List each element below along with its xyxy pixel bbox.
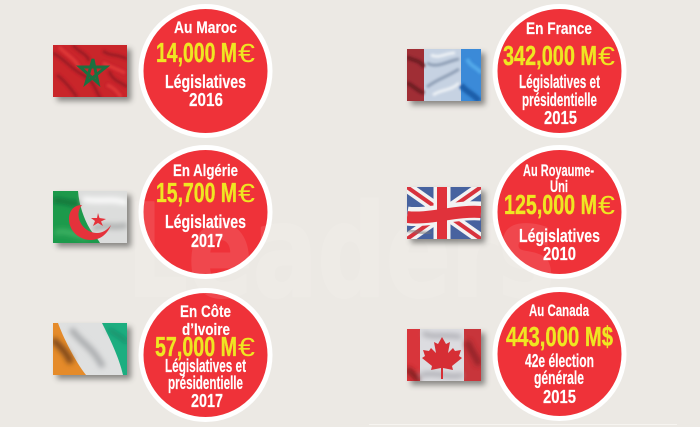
text: Algérie: En Algérie <box>173 161 238 180</box>
circle: Côte d'Ivoire <box>141 290 270 420</box>
text: Canada: générale <box>534 367 584 388</box>
text: Royaume-Uni: 125,000 M <box>504 189 597 220</box>
text: Maroc: 14,000 M <box>156 37 237 68</box>
text: France: présidentielle <box>522 89 597 110</box>
flag: Royaume-Uni <box>407 187 481 239</box>
text: Maroc <box>156 18 256 110</box>
text: Maroc: Au Maroc <box>174 18 237 37</box>
circle: Royaume-Uni <box>495 148 624 276</box>
flag: Algérie <box>53 191 127 243</box>
circle: Canada <box>495 290 624 418</box>
text: Algérie: 2017 <box>191 230 223 251</box>
flag: Canada <box>407 329 481 381</box>
text: Côte d'Ivoire: En Côte <box>180 302 231 321</box>
text: Côte d'Ivoire: Législatives et <box>165 355 246 376</box>
text: Royaume-Uni <box>504 161 616 264</box>
text: France: € <box>598 41 616 71</box>
text: Maroc: 2016 <box>189 89 223 110</box>
text: Algérie: € <box>238 178 256 208</box>
text: Maroc: € <box>238 38 256 68</box>
text: Royaume-Uni: € <box>598 190 616 220</box>
text: Royaume-Uni: Législatives <box>519 225 600 246</box>
flag: France <box>407 49 481 101</box>
text: Royaume-Uni: 2010 <box>543 243 576 264</box>
background line <box>369 424 677 425</box>
flag: Maroc <box>53 45 127 99</box>
text: Royaume-Uni: Uni <box>550 177 568 196</box>
watermark: Leaders <box>127 178 555 327</box>
flag: Côte d'Ivoire <box>53 323 127 375</box>
circle: Maroc <box>141 6 270 136</box>
text: Canada: 42e élection <box>525 350 594 371</box>
text: Côte d'Ivoire: présidentielle <box>168 372 243 393</box>
circle: Algérie <box>141 148 270 276</box>
text: France: 342,000 M <box>503 40 597 71</box>
text: France: Législatives et <box>519 71 600 92</box>
text: Côte d'Ivoire: 57,000 M <box>155 331 237 362</box>
text: Algérie: Législatives <box>165 211 246 232</box>
text: Canada: 2015 <box>543 386 576 407</box>
circle: France <box>495 6 624 136</box>
text: Côte d'Ivoire <box>155 302 256 411</box>
text: Royaume-Uni: Au Royaume- <box>523 161 594 180</box>
text: France: En France <box>526 19 592 38</box>
text: Algérie: 15,700 M <box>156 177 237 208</box>
text: Canada <box>506 301 613 407</box>
text: Côte d'Ivoire: 2017 <box>191 390 223 411</box>
text: Canada: 443,000 M$ <box>506 321 613 352</box>
text: Côte d'Ivoire: € <box>238 332 256 362</box>
text: Canada: Au Canada <box>529 301 589 320</box>
text: France <box>503 19 616 128</box>
text: Côte d'Ivoire: d’Ivoire <box>182 320 230 339</box>
text: Maroc: Législatives <box>165 71 246 92</box>
text: Algérie <box>156 161 256 251</box>
text: France: 2015 <box>544 107 577 128</box>
